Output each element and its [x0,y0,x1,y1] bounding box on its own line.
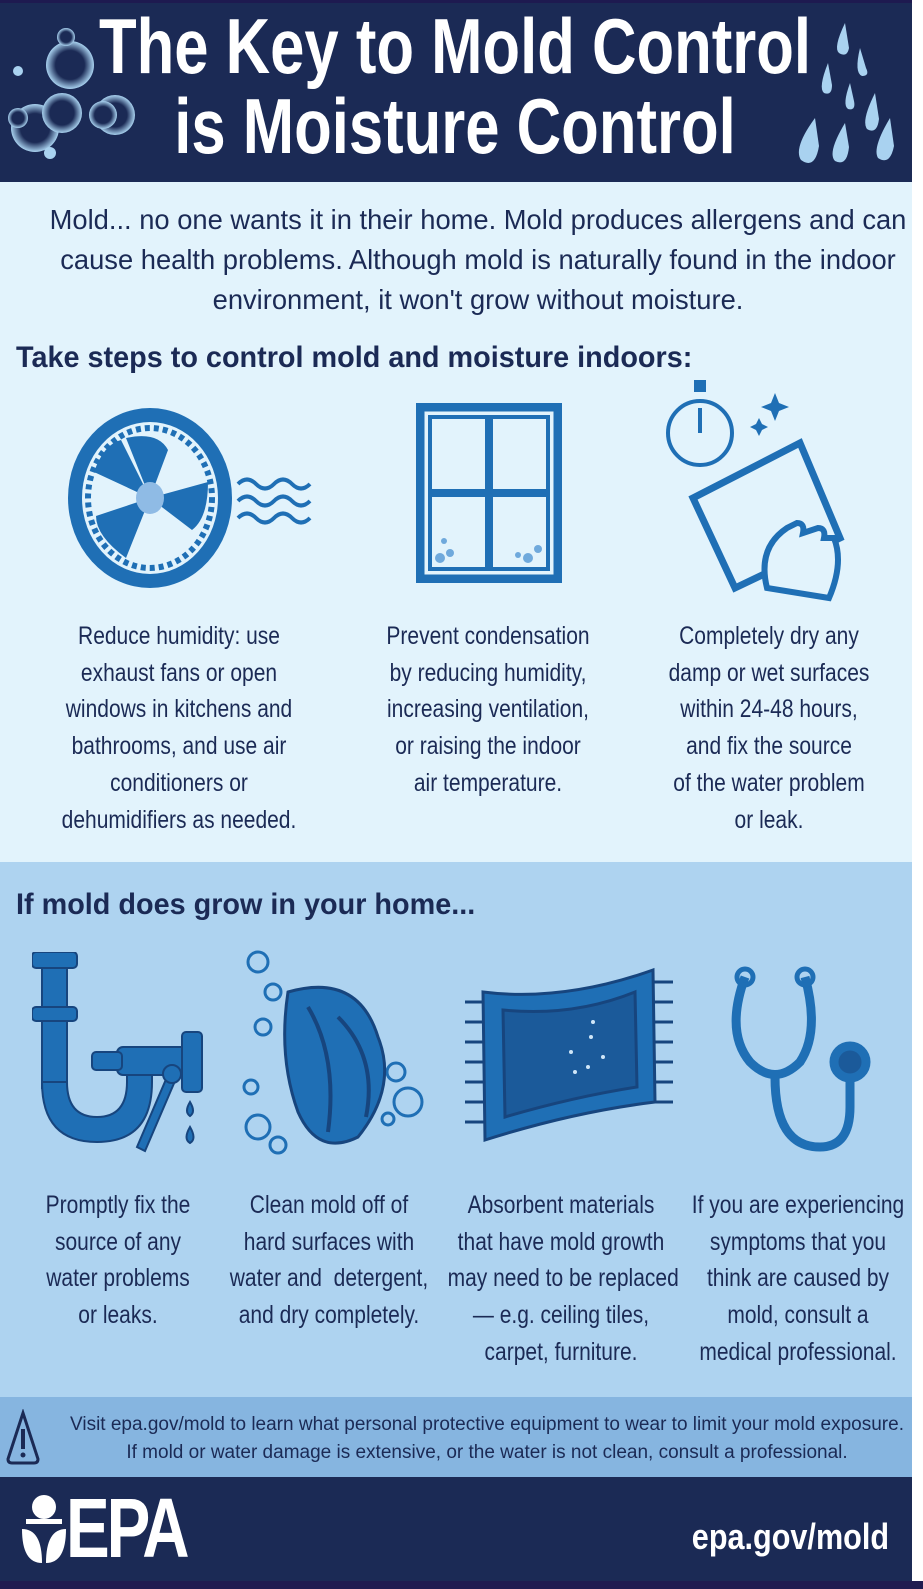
panel: light section [0,182,912,862]
caption: reduce humidity: dehumidifiers as needed. [62,806,296,834]
heading: if mold grows: If mold does grow in your home... [16,888,475,921]
logo: EPA: EPA [66,1481,186,1575]
caption: dry surfaces: within 24-48 hours, [680,695,858,723]
icon: stethoscope [732,966,870,1152]
caption: prevent condensation [386,622,590,797]
caption: dry surfaces: or leak. [735,806,803,834]
bottom band [0,1581,923,1589]
caption: medical [692,1191,904,1366]
url: epa.gov/mold [692,1516,889,1557]
caption: medical: think are caused by [707,1264,889,1292]
caption: absorbent materials: may need to be replaced [448,1264,679,1292]
caption: prevent condensation: or raising the indoor [395,732,581,760]
icon: window [416,403,562,583]
caption: absorbent materials: carpet, furniture. [485,1338,637,1366]
icon: mold bubbles [8,28,135,159]
caption: absorbent materials: that have mold growth [458,1228,664,1256]
warning text [70,1414,904,1463]
panel: mold grows section [0,862,912,1397]
title: is Moisture Control [174,82,736,170]
icon: water drops [798,23,894,163]
caption: medical: medical professional. [699,1338,897,1366]
icon: cloth with bubbles [242,950,424,1154]
caption: prevent condensation: Prevent condensation [386,622,590,650]
intro text: cause health problems. Although mold is naturally found in the indoor [60,244,896,275]
icon: exhaust fan [68,408,312,588]
caption: reduce humidity: bathrooms, and use air [72,732,286,760]
caption: dry surfaces: of the water problem [673,769,865,797]
header [0,0,912,182]
caption: reduce humidity: conditioners or [110,769,248,797]
icon: stopwatch and wiping hand [666,380,844,602]
icon: rug [465,968,673,1142]
intro text: environment, it won't grow without moisture. [213,284,743,315]
caption: medical: mold, consult a [727,1301,869,1329]
caption: dry surfaces: and fix the source [686,732,852,760]
caption: prevent condensation: increasing ventilation, [387,695,589,723]
caption: medical: If you are experiencing [692,1191,904,1219]
caption: clean mold: Clean mold off of [250,1191,408,1219]
caption: clean mold: water and detergent, [230,1264,428,1292]
caption: clean mold [230,1191,428,1329]
caption: dry surfaces: Completely dry any [679,622,859,650]
caption: fix source: Promptly fix the [46,1191,190,1219]
icon: warning triangle [6,1409,40,1464]
title: The Key to Mold Control [99,2,811,90]
caption: reduce humidity: exhaust fans or open [81,659,277,687]
caption: prevent condensation: air temperature. [414,769,562,797]
intro text: Mold... no one wants it in their home. Mold produces allergens and can [50,204,906,235]
intro text [50,204,906,315]
caption: dry surfaces [669,622,869,834]
caption: fix source: or leaks. [78,1301,158,1329]
caption: reduce humidity [62,622,296,834]
caption: reduce humidity: windows in kitchens and [66,695,292,723]
warning text: Visit epa.gov/mold to learn what personal protective equipment to wear to limit your mold exposure. [70,1414,904,1435]
caption: dry surfaces: damp or wet surfaces [669,659,869,687]
caption: absorbent materials [448,1191,679,1366]
caption: absorbent materials: — e.g. ceiling tiles, [473,1301,649,1329]
caption: clean mold: and dry completely. [239,1301,419,1329]
heading: take steps: Take steps to control mold and moisture indoors: [16,341,692,374]
warning bar [0,1397,912,1477]
warning text: If mold or water damage is extensive, or the water is not clean, consult a professional. [126,1442,848,1463]
caption: fix source [46,1191,190,1329]
caption: absorbent materials: Absorbent materials [468,1191,654,1219]
caption: fix source: source of any [55,1228,181,1256]
caption: reduce humidity: Reduce humidity: use [78,622,280,650]
footer [0,1477,912,1581]
icon: leaking pipe [32,952,203,1152]
caption: clean mold: hard surfaces with [244,1228,414,1256]
caption: fix source: water problems [46,1264,190,1292]
caption: prevent condensation: by reducing humidity, [390,659,586,687]
title [99,2,811,170]
caption: medical: symptoms that you [710,1228,886,1256]
